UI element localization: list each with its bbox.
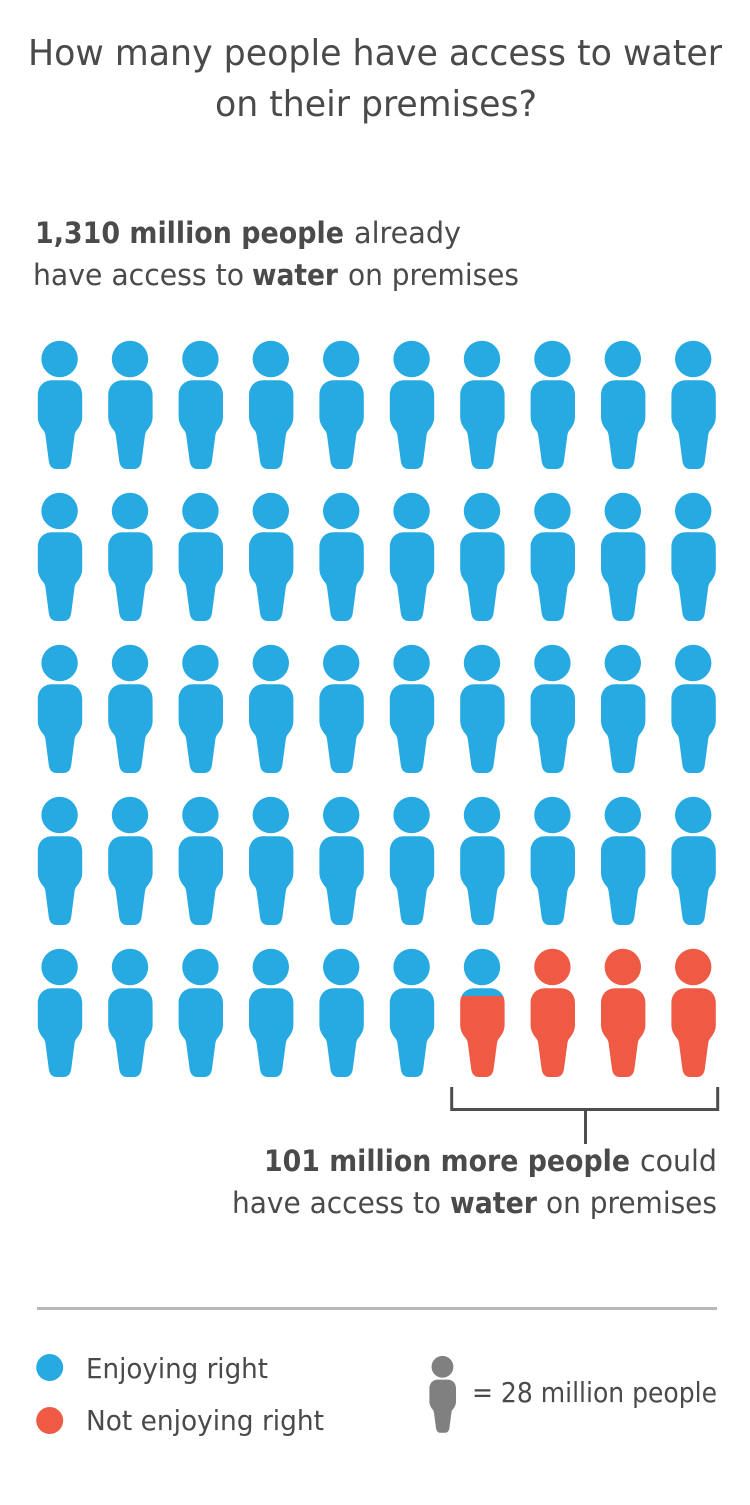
row 5 of people: red (531, 949, 716, 1077)
text block: people with access: have access to (33, 258, 244, 292)
text block: people with access (33, 216, 519, 292)
title (28, 33, 723, 125)
text block: people with access: water (252, 258, 339, 292)
legend: unit label: = 28 million people (472, 1376, 717, 1409)
text block: people without access: water (450, 1186, 538, 1220)
title: on their premises? (215, 84, 537, 125)
row 5 of people: blue (38, 949, 434, 1077)
legend (36, 1352, 717, 1437)
row 2 of people (38, 493, 716, 621)
pictogram chart: 50 people (38, 341, 716, 1077)
text block: people with access: already (354, 216, 461, 250)
legend: unit person icon (429, 1356, 456, 1433)
text block: people without access (232, 1144, 717, 1220)
row 4 of people (38, 797, 716, 925)
text block: people without access: have access to (232, 1186, 441, 1220)
partly filled person (460, 949, 505, 1077)
text block: people with access: on premises (348, 258, 519, 292)
bracket (452, 1087, 718, 1144)
row 1 of people (38, 341, 716, 469)
legend: enjoying right: Enjoying right (86, 1352, 268, 1385)
text block: people with access: 1,310 million people (35, 216, 344, 250)
title: How many people have access to water (28, 33, 723, 74)
text block: people without access: on premises (546, 1186, 717, 1220)
text block: people without access: could (640, 1144, 717, 1178)
row 3 of people (38, 645, 716, 773)
legend: not enjoying right: Not enjoying right (86, 1404, 324, 1437)
text block: people without access: 101 million more people (264, 1144, 630, 1178)
